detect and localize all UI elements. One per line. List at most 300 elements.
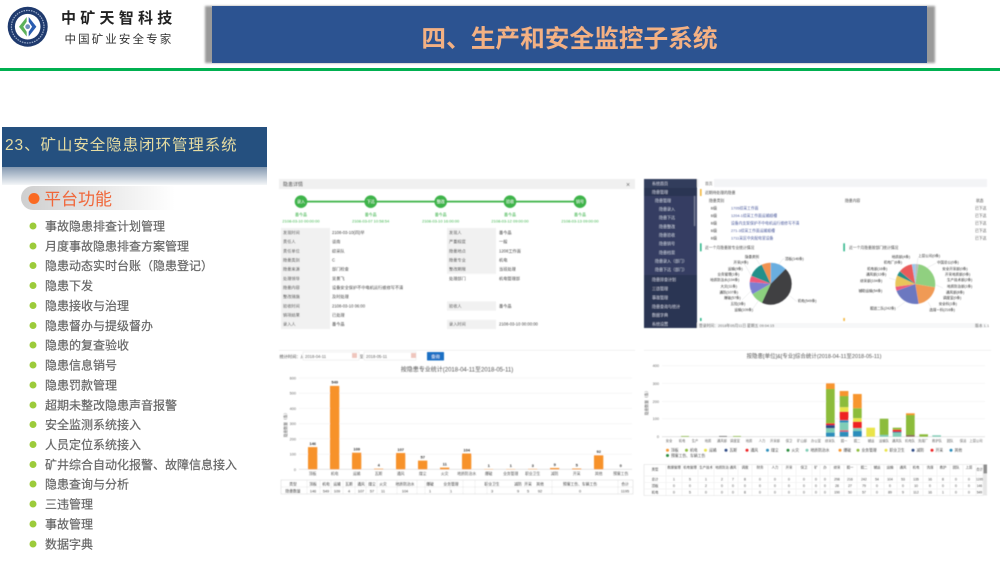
bar chart: 其他 bbox=[595, 471, 603, 476]
function list: 事故管理 bbox=[45, 516, 93, 532]
function list: 隐患罚款管理 bbox=[45, 378, 117, 392]
sidebar: 隐患验收 bbox=[659, 232, 675, 238]
pie chart: by specialty: 五险(3条) bbox=[731, 301, 745, 306]
combined data table: 53 bbox=[901, 478, 905, 482]
combined data table: 救护 bbox=[940, 464, 947, 470]
detail table: 综采队 bbox=[332, 247, 345, 254]
unit labels: 安全 bbox=[666, 438, 673, 443]
combined data table: 类型 bbox=[652, 466, 659, 472]
workflow steps: 2108-03-07 10:58:54 bbox=[352, 218, 390, 224]
panel: hazard detail: 隐患详情 bbox=[283, 181, 303, 188]
legend: 通风 bbox=[750, 448, 758, 453]
combined data table: 0 bbox=[824, 478, 826, 482]
bar chart: 200 bbox=[290, 437, 296, 441]
pie chart: by department: 综采部(104条) bbox=[860, 278, 882, 283]
heading: platform functions: 平台功能 bbox=[44, 190, 112, 209]
data table: 火灾 bbox=[379, 482, 387, 486]
legend: 职业卫生 bbox=[890, 448, 905, 453]
detail table: 隐患来源 bbox=[283, 266, 301, 273]
notice list: 已下达 bbox=[975, 236, 987, 241]
notice list: 1705综采工作面 bbox=[731, 206, 759, 210]
combined data table: 机电管理 bbox=[683, 464, 697, 470]
legend: 煤尘 bbox=[771, 448, 779, 453]
company name bbox=[61, 9, 177, 46]
pie chart: by specialty: 近一个月隐患按专业统计情况 bbox=[705, 245, 755, 250]
company name: 中矿天智科技 bbox=[61, 9, 177, 27]
legend: 减防 bbox=[916, 448, 924, 453]
detail table bbox=[281, 228, 539, 329]
combined data table: 财务 bbox=[757, 464, 764, 470]
notice list: 状态 bbox=[976, 198, 984, 203]
bar chart: 开采 bbox=[573, 471, 581, 476]
legend: 其他 bbox=[954, 448, 962, 453]
date filter: 查询 bbox=[431, 353, 440, 360]
pie chart: by department: 机电厂(6条) bbox=[884, 260, 902, 264]
pie chart: by department: 安全开采部(0条) bbox=[942, 266, 968, 271]
legend: 开采 bbox=[936, 448, 943, 453]
notice list: B级 bbox=[711, 213, 717, 218]
bar chart: 煤尘 bbox=[419, 471, 427, 476]
stacked bars: 200 bbox=[653, 400, 659, 404]
stacked bars: 400 bbox=[653, 364, 659, 368]
date filter: 统计时间：从 bbox=[280, 353, 305, 360]
panel: stacked bar chart by unit: 按隐患[单位]&[专业]综合统计(2018-04-11至2018-05-11) bbox=[747, 352, 882, 360]
notice list: 设备内支架保护不中电机运行维修写不清 bbox=[731, 221, 800, 226]
unit labels: 保洁 bbox=[960, 438, 967, 443]
function list bbox=[30, 218, 237, 552]
pie chart: by department: 通风部(13条) bbox=[866, 272, 886, 276]
data table: 9 bbox=[517, 490, 519, 494]
combined data table: 通风 bbox=[900, 464, 907, 470]
data table: 合计 bbox=[621, 482, 629, 486]
unit labels bbox=[666, 438, 983, 443]
notice list: 271-3综采工作面运输顺槽 bbox=[731, 228, 775, 233]
pie chart: by department: 中国总公(0条) bbox=[937, 260, 959, 264]
bar 2 bbox=[840, 391, 848, 437]
combined data table: 5 bbox=[689, 490, 691, 494]
function list: 安全监测系统接入 bbox=[45, 417, 141, 432]
detail table: 验收时间 bbox=[283, 302, 300, 309]
unit labels: 生产 bbox=[692, 438, 699, 443]
function list: 隐患的复查验收 bbox=[45, 338, 129, 352]
stacked bars: 300 bbox=[653, 382, 659, 386]
sidebar: 隐患录入 bbox=[659, 206, 675, 212]
workflow steps: 番今晶 bbox=[435, 211, 447, 217]
combined data table: 开采 bbox=[786, 464, 793, 470]
pie chart: by department: 上层公司(0条) bbox=[918, 253, 940, 258]
unit labels: 通风部 bbox=[717, 438, 728, 443]
function list: 矿井综合自动化报警、故障信息接入 bbox=[45, 457, 237, 472]
data table: 549 bbox=[323, 490, 329, 494]
bar chart: 0 bbox=[620, 463, 623, 468]
detail table: 已处理 bbox=[332, 312, 345, 318]
detail table: C bbox=[332, 258, 335, 262]
company name: 中国矿业安全专家 bbox=[64, 32, 173, 46]
combined data table: 79 bbox=[862, 484, 866, 488]
combined data table: 地质防治 bbox=[715, 464, 729, 470]
detail table: 销项结果 bbox=[283, 312, 301, 318]
legend bbox=[666, 448, 962, 458]
data table: 1 bbox=[450, 490, 452, 494]
detail table: 设备安全保护不中电机运行维修写不清 bbox=[332, 284, 403, 291]
notice list: 1204-1综采工作面运输顺槽 bbox=[731, 213, 777, 218]
sidebar: 隐患下达（部门） bbox=[655, 266, 687, 272]
workflow steps: 验收 bbox=[506, 198, 514, 204]
combined data table: 8 bbox=[744, 490, 746, 494]
stacked bars: 0 bbox=[657, 435, 659, 439]
legend: 瓦斯 bbox=[730, 448, 737, 453]
data table bbox=[281, 480, 633, 494]
data table: 预案工伤、车辆工伤 bbox=[563, 482, 597, 486]
sidebar: 事故管理 bbox=[652, 294, 668, 300]
combined data table: 0 bbox=[689, 484, 691, 488]
combined data table: 通风 bbox=[730, 464, 737, 470]
detail table: 当班处理 bbox=[499, 266, 517, 273]
data table: 1 bbox=[429, 490, 431, 494]
detail table: 1208工作面 bbox=[499, 247, 521, 254]
notice list: 隐患类别 bbox=[709, 198, 724, 203]
detail table: 2108-03-10 00:00:00 bbox=[499, 322, 539, 327]
panel: hazard detail: × bbox=[626, 182, 630, 189]
combined data table: 0 bbox=[759, 478, 761, 482]
notice list: 已下达 bbox=[975, 206, 987, 210]
combined data table: 0 bbox=[673, 490, 675, 494]
combined data table: 0 bbox=[815, 490, 817, 494]
combined data table: 0 bbox=[815, 484, 817, 488]
combined data table: 0 bbox=[876, 490, 878, 494]
combined data table: 0 bbox=[759, 484, 761, 488]
data table: 5 bbox=[527, 490, 529, 494]
unit labels: 综采队 bbox=[825, 438, 836, 443]
combined data table: 28 bbox=[835, 484, 839, 488]
bar 1 bbox=[826, 383, 835, 437]
combined data table: 112 bbox=[913, 490, 919, 494]
date filter bbox=[279, 350, 635, 360]
legend: 爆破 bbox=[844, 448, 851, 453]
status bar: 登录时间：2018年05月11日 星期五 09:04:15 bbox=[699, 323, 774, 328]
date filter: 至 bbox=[360, 354, 364, 359]
detail table: 发现人 bbox=[449, 229, 462, 236]
detail table: 责任单位 bbox=[283, 247, 300, 254]
stacked bars: 隐患数量（条） bbox=[644, 389, 649, 415]
combined data table: 机电 bbox=[913, 464, 920, 470]
notice list: B级 bbox=[711, 236, 717, 241]
workflow steps: 整改 bbox=[437, 198, 445, 204]
bar chart: 隐患数量（条） bbox=[283, 411, 288, 437]
detail table: 发现时间 bbox=[283, 229, 300, 236]
data table: 运输 bbox=[333, 482, 341, 486]
bar chart: 600 bbox=[290, 376, 296, 380]
detail table: 部门检查 bbox=[332, 266, 350, 273]
detail table: 2108-03-10 06:00 bbox=[332, 303, 366, 308]
unit labels: 机电 bbox=[679, 438, 686, 443]
workflow steps: 下达 bbox=[367, 198, 375, 204]
data table: 1195 bbox=[621, 490, 629, 494]
combined data table: 救援管理 bbox=[667, 464, 681, 470]
data table: 隐患数量 bbox=[285, 488, 301, 494]
pie chart: by department bbox=[843, 243, 972, 312]
data table: 0 bbox=[579, 490, 581, 494]
workflow steps: 番今晶 bbox=[295, 211, 307, 217]
combined data table: 0 bbox=[889, 484, 891, 488]
combined data table: 保卫 bbox=[801, 464, 808, 470]
combined data table: 216 bbox=[847, 478, 853, 482]
bar 3 bbox=[853, 394, 862, 437]
workflow steps: 番今晶 bbox=[574, 211, 586, 217]
function list: 隐患动态实时台账（隐患登记） bbox=[45, 258, 213, 273]
data table: 146 bbox=[310, 490, 316, 494]
function list: 隐患下发 bbox=[45, 278, 93, 293]
status bar: 版本 1.1 bbox=[975, 323, 989, 328]
bar chart: 爆破 bbox=[485, 471, 493, 476]
combined data table: 0 bbox=[968, 478, 970, 482]
detail table: 处理部门 bbox=[449, 275, 466, 282]
detail table: 及时处理 bbox=[332, 293, 350, 300]
combined data table: 27 bbox=[848, 484, 852, 488]
detail table: 机电管理部 bbox=[499, 275, 520, 282]
data table: 减防 bbox=[514, 482, 522, 486]
combined data table: 0 bbox=[705, 490, 707, 494]
function list: 隐患查询与分析 bbox=[45, 478, 129, 492]
combined data table: 0 bbox=[955, 490, 957, 494]
bar chart: 1 bbox=[510, 463, 513, 468]
unit labels: 地质 bbox=[705, 438, 712, 443]
bar chart: 业务管理 bbox=[503, 471, 518, 476]
combined data table: 机电 bbox=[652, 490, 659, 494]
combined data table: 242 bbox=[861, 478, 867, 482]
combined data table: 0 bbox=[824, 490, 826, 494]
data table: 职业卫生 bbox=[484, 482, 500, 486]
date filter: 2018-04-11 bbox=[305, 354, 327, 359]
data table: 类型 bbox=[289, 482, 297, 486]
sidebar: 隐患管理 bbox=[652, 188, 668, 194]
bar chart: 100 bbox=[290, 452, 296, 456]
detail table: 隐患地点 bbox=[449, 247, 466, 254]
combined data table: 总计 bbox=[652, 476, 659, 482]
workflow steps: 录入 bbox=[297, 198, 305, 204]
combined data table: 0 bbox=[942, 484, 944, 488]
combined data table: 1195 bbox=[976, 478, 983, 482]
data table: 109 bbox=[334, 490, 340, 494]
legend: 机电 bbox=[690, 448, 698, 453]
combined data table: 0 bbox=[721, 484, 723, 488]
combined data table: 104 bbox=[887, 478, 893, 482]
notice list: 近期待处理的隐患 bbox=[705, 190, 736, 195]
unit labels: 机电队 bbox=[905, 438, 916, 443]
panel: bar chart by specialty bbox=[279, 350, 635, 494]
stacked bars: 100 bbox=[653, 417, 659, 421]
combined data table: 16 bbox=[928, 490, 932, 494]
data table: 煤尘 bbox=[368, 482, 376, 486]
detail table: 2108-03-10(四)早 bbox=[332, 230, 365, 236]
company logo bbox=[8, 7, 48, 47]
unit labels: 掘二 bbox=[854, 438, 861, 443]
bar chart: 瓦斯 bbox=[375, 471, 383, 476]
workflow steps: 2108-03-12 09:00:00 bbox=[491, 218, 529, 224]
sidebar: 隐患管理 bbox=[655, 197, 671, 203]
combined data table: 0 bbox=[788, 478, 790, 482]
combined data table: 辅运 bbox=[874, 464, 881, 470]
function list: 数据字典 bbox=[45, 536, 93, 552]
detail table: 整改期限 bbox=[449, 266, 467, 273]
notice list: 已下达 bbox=[975, 221, 987, 226]
workflow steps: 番今晶 bbox=[365, 211, 377, 217]
combined data table: 洗煤 bbox=[927, 464, 934, 470]
sidebar: 隐患排查计划 bbox=[652, 276, 676, 282]
combined data table: 运输 bbox=[887, 464, 894, 470]
pie chart: by department: 近一个月隐患按部门统计情况 bbox=[849, 245, 899, 250]
stacked bars bbox=[644, 364, 985, 443]
data table: 顶板 bbox=[309, 482, 317, 486]
legend: 地质防治水 bbox=[810, 448, 830, 453]
unit labels: 上层公司 bbox=[969, 438, 983, 443]
legend: 运输 bbox=[709, 448, 717, 453]
detail table: 吴景飞 bbox=[332, 276, 345, 282]
sidebar: 隐患整改 bbox=[659, 223, 675, 229]
combined data table: 0 bbox=[803, 478, 805, 482]
combined data table: 135 bbox=[913, 478, 919, 482]
combined data table: 54 bbox=[875, 478, 879, 482]
detail table: 录入人 bbox=[283, 321, 296, 327]
bar chart: 火灾 bbox=[441, 471, 449, 476]
pie chart: by department: 机电部(16条) bbox=[867, 266, 887, 271]
pie chart: by department: 安全科(1条) bbox=[939, 301, 957, 306]
combined data table: 上层 bbox=[966, 464, 973, 470]
detail table: 责任人 bbox=[283, 238, 296, 245]
data table: 通风 bbox=[357, 482, 365, 486]
bar chart: 地质防治水 bbox=[457, 471, 476, 476]
notice list: 1711采区中央配电室设备 bbox=[731, 236, 774, 241]
bar chart: 500 bbox=[290, 392, 296, 396]
combined data table: 调度 bbox=[742, 464, 749, 470]
combined data table: 0 bbox=[721, 490, 723, 494]
combined data table: 0 bbox=[788, 490, 790, 494]
pie chart: by specialty: 隐患类别 bbox=[745, 254, 759, 259]
unit labels: 保卫 bbox=[786, 438, 793, 443]
notice list bbox=[697, 179, 987, 241]
detail table: 验收人 bbox=[449, 302, 462, 309]
bar chart: 运输 bbox=[353, 471, 361, 476]
data table: 11 bbox=[381, 490, 385, 494]
combined data table: 0 bbox=[774, 490, 776, 494]
section banner: 23、矿山安全隐患闭环管理系统 bbox=[5, 136, 238, 154]
data table: 瓦斯 bbox=[345, 482, 353, 486]
legend: 预案工伤、车辆工伤 bbox=[671, 453, 705, 458]
pie chart: by department: 地质部(4条) bbox=[892, 254, 910, 259]
combined data table: 0 bbox=[955, 478, 957, 482]
pie chart: by department: 掘进二队(242条) bbox=[870, 306, 896, 310]
pie chart: by specialty bbox=[700, 243, 816, 312]
unit labels: 地质 bbox=[746, 438, 753, 443]
detail table: 严重程度 bbox=[449, 238, 467, 245]
smaller bars bbox=[681, 413, 941, 437]
detail table: 番今晶 bbox=[499, 229, 512, 236]
combined data table: 办 bbox=[823, 464, 827, 470]
combined data table: 0 bbox=[803, 484, 805, 488]
combined data table: 0 bbox=[803, 490, 805, 494]
combined data table: 顶板 bbox=[652, 483, 659, 488]
unit labels: 调度室 bbox=[730, 438, 741, 443]
legend: 顶板 bbox=[671, 448, 679, 453]
detail table: 整改措施 bbox=[283, 293, 301, 300]
date filter: 2018-05-11 bbox=[366, 354, 388, 359]
detail table: 处理领导 bbox=[283, 275, 300, 282]
title banner bbox=[205, 6, 935, 63]
combined data table: 8 bbox=[744, 478, 746, 482]
data table: 107 bbox=[358, 490, 364, 494]
data table: 57 bbox=[370, 490, 374, 494]
sidebar: 隐患查询与统计 bbox=[652, 303, 680, 309]
bar chart bbox=[283, 376, 632, 476]
combined data table: 5 bbox=[689, 478, 691, 482]
pie chart: by specialty: 业务管理(1条) bbox=[718, 272, 739, 276]
combined data table: 0 bbox=[824, 484, 826, 488]
workflow steps: 2108-03-10 00:00:00 bbox=[282, 218, 320, 224]
pie chart: by department: 通风部(8条) bbox=[946, 290, 964, 294]
heading: platform functions bbox=[21, 186, 175, 210]
data table: 地质防治水 bbox=[396, 482, 415, 486]
pie chart: by specialty: 通防(107条) bbox=[719, 290, 738, 294]
sidebar: 隐患录入（部门） bbox=[655, 258, 687, 264]
unit labels: 洗煤厂 bbox=[918, 438, 929, 443]
data table: 机电 bbox=[322, 482, 330, 486]
bar chart: 104 bbox=[463, 448, 471, 452]
bar chart: 11 bbox=[443, 462, 448, 466]
combined data table bbox=[644, 464, 987, 496]
data table: 104 bbox=[402, 490, 408, 494]
pie chart: by specialty: 运输(9条) bbox=[728, 266, 743, 271]
sidebar: 系统设置 bbox=[652, 320, 668, 326]
header divider bbox=[0, 68, 1000, 71]
pie chart: by department: 开采地质部(0条) bbox=[945, 272, 970, 276]
workflow steps: 销号 bbox=[576, 198, 584, 204]
workflow steps: 2108-03-10 16:00:00 bbox=[422, 218, 460, 224]
notice list: B级 bbox=[711, 221, 717, 226]
bar chart: 顶板 bbox=[309, 471, 317, 476]
notice list: 隐患内容 bbox=[845, 198, 860, 203]
combined data table: 549 bbox=[977, 490, 982, 494]
bar chart: 107 bbox=[397, 447, 405, 452]
combined data table: 146 bbox=[977, 484, 982, 488]
bar chart: 0 bbox=[294, 468, 296, 472]
combined data table: 1 bbox=[705, 478, 707, 482]
unit labels: 掘一 bbox=[841, 438, 848, 443]
bar chart: 通风 bbox=[397, 471, 405, 476]
legend: 业务管理 bbox=[862, 448, 877, 453]
legend: 火灾 bbox=[792, 448, 799, 453]
bar chart: 预案工伤 bbox=[613, 471, 628, 476]
combined data table: 掘二 bbox=[861, 464, 868, 470]
function list: 月度事故隐患排查方案管理 bbox=[45, 238, 189, 254]
pie chart: by specialty: 大灾(11条) bbox=[721, 284, 737, 288]
combined data table: 8 bbox=[942, 478, 944, 482]
bar chart: 职业卫生 bbox=[525, 471, 540, 476]
combined data table: 0 bbox=[744, 484, 746, 488]
detail table: 隐患类别 bbox=[283, 256, 300, 264]
panel: dashboard screenshot bbox=[644, 179, 989, 328]
function list: 三违管理 bbox=[45, 496, 93, 512]
pie chart: by specialty: 顶板(146条) bbox=[785, 256, 804, 261]
detail table: 番今晶 bbox=[499, 302, 512, 309]
unit labels: 团队 bbox=[947, 438, 954, 443]
notice list: 已下达 bbox=[975, 228, 987, 233]
sidebar: 隐患档案 bbox=[659, 249, 675, 255]
pie chart: by department: 地质防治部(1条) bbox=[947, 284, 972, 288]
pie chart: by specialty: 地质防治水(104条) bbox=[710, 277, 739, 282]
notice list: 首页 bbox=[705, 181, 713, 186]
combined data table: 50 bbox=[848, 490, 852, 494]
pie chart: by department: 辅助运输(54条) bbox=[859, 288, 882, 293]
